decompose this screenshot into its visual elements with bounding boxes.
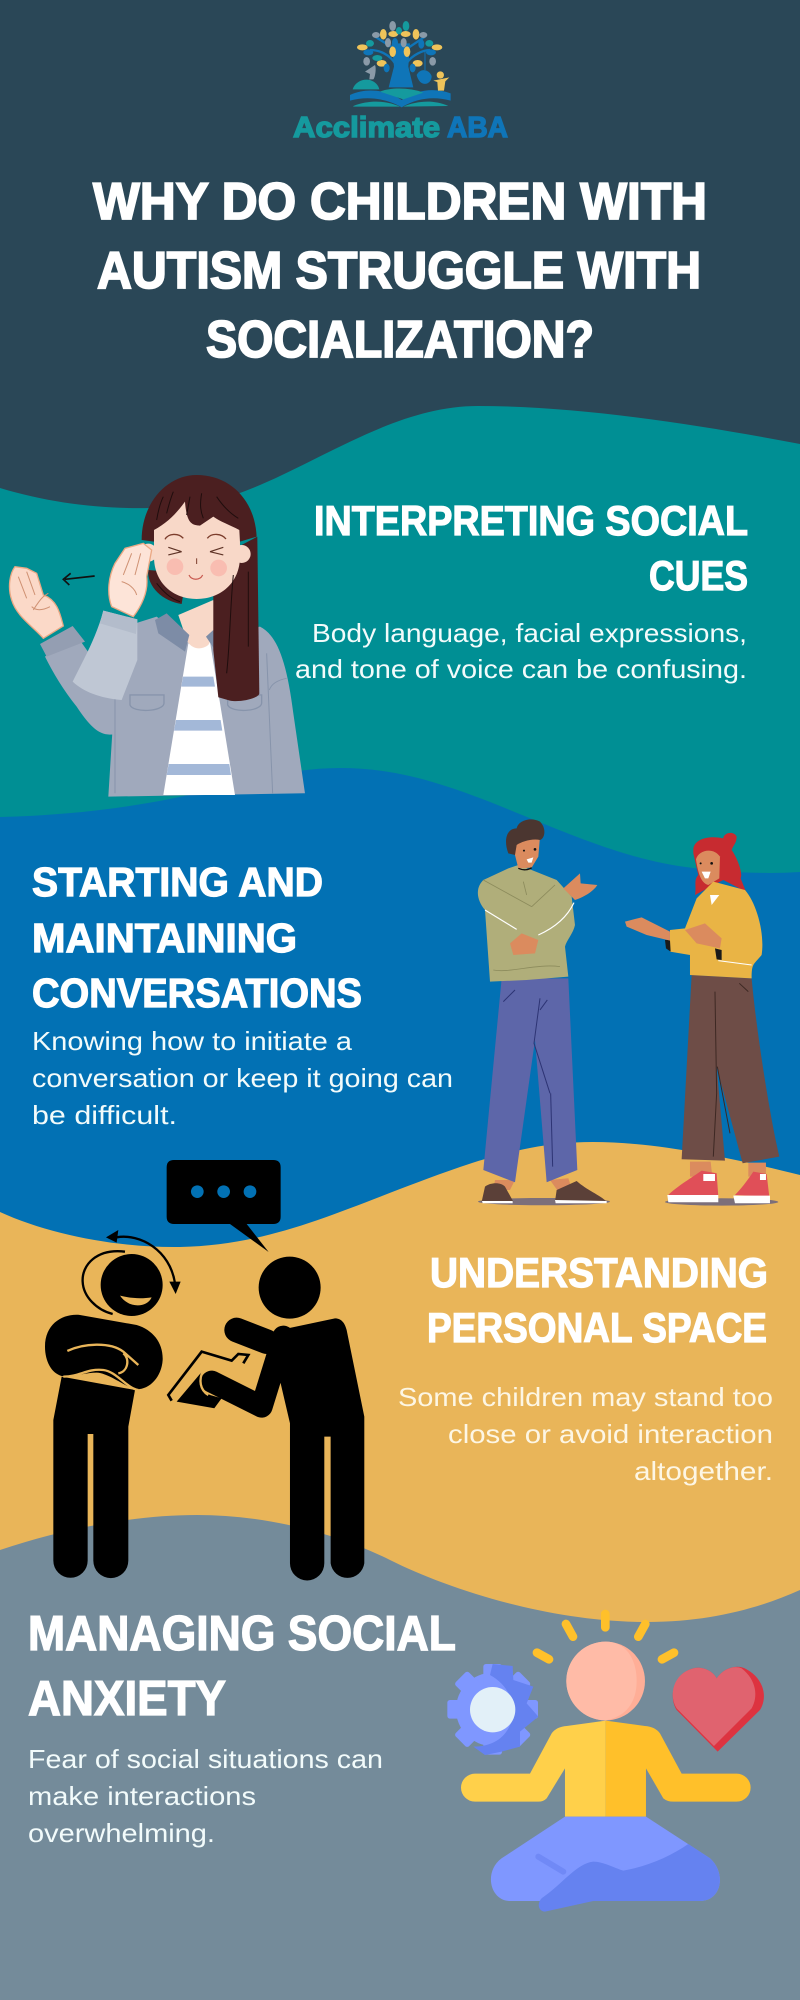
logo: Acclimate ABA	[293, 21, 508, 144]
text: conversations body: Knowing how to initiate a	[32, 1026, 353, 1056]
title: AUTISM STRUGGLE WITH	[97, 242, 701, 300]
title: WHY DO CHILDREN WITH	[93, 173, 707, 231]
panel: blue wave	[0, 768, 800, 2000]
text: personal space body: altogether.	[634, 1456, 773, 1486]
text: social anxiety body: make interactions	[28, 1781, 256, 1811]
heading: managing social anxiety: MANAGING SOCIAL	[28, 1607, 456, 1661]
text: interpreting social cues body: Body language, facial expressions,	[312, 618, 747, 648]
heading: starting and maintaining conversations: MAINTAINING	[32, 915, 297, 961]
heading: interpreting social cues	[314, 497, 748, 599]
heading: interpreting social cues: CUES	[649, 552, 748, 599]
text: social anxiety body: Fear of social situations can	[28, 1744, 383, 1774]
text: social anxiety body	[28, 1744, 383, 1848]
text: conversations body: conversation or keep it going can	[32, 1063, 453, 1093]
logo: Acclimate ABA: Acclimate	[293, 112, 440, 144]
heading: starting and maintaining conversations: STARTING AND	[32, 859, 323, 905]
title	[93, 173, 707, 369]
illustration: two people talking	[478, 819, 779, 1206]
illustration: girl signing	[9, 475, 305, 797]
panel: teal wave	[0, 406, 800, 2000]
illustration: pictogram two figures	[45, 1160, 364, 1580]
text: conversations body: be difficult.	[32, 1100, 177, 1130]
text: personal space body: close or avoid interaction	[448, 1419, 773, 1449]
heading: starting and maintaining conversations	[32, 859, 362, 1016]
heading: interpreting social cues: INTERPRETING SOCIAL	[314, 497, 748, 544]
heading: understanding personal space	[427, 1249, 768, 1351]
text: interpreting social cues body: and tone of voice can be confusing.	[295, 654, 747, 684]
heading: managing social anxiety	[28, 1607, 456, 1726]
icon: rays	[537, 1614, 674, 1659]
icon: gear	[447, 1664, 538, 1755]
illustration: meditating person	[447, 1614, 764, 1912]
text: interpreting social cues body	[295, 618, 747, 684]
text: social anxiety body: overwhelming.	[28, 1818, 215, 1848]
icon: heart	[673, 1667, 764, 1752]
heading: understanding personal space: UNDERSTANDING	[430, 1249, 768, 1296]
text: personal space body: Some children may stand too	[398, 1382, 773, 1412]
heading: starting and maintaining conversations: CONVERSATIONS	[32, 970, 362, 1016]
panel: slate wave	[0, 1515, 800, 2000]
text: personal space body	[398, 1382, 773, 1486]
icon: speech bubble	[167, 1160, 281, 1252]
text: conversations body	[32, 1026, 453, 1130]
title: SOCIALIZATION?	[206, 311, 594, 369]
panel: yellow wave	[0, 1142, 800, 2000]
heading: managing social anxiety: ANXIETY	[28, 1672, 226, 1726]
logo: Acclimate ABA: ABA	[447, 112, 508, 144]
